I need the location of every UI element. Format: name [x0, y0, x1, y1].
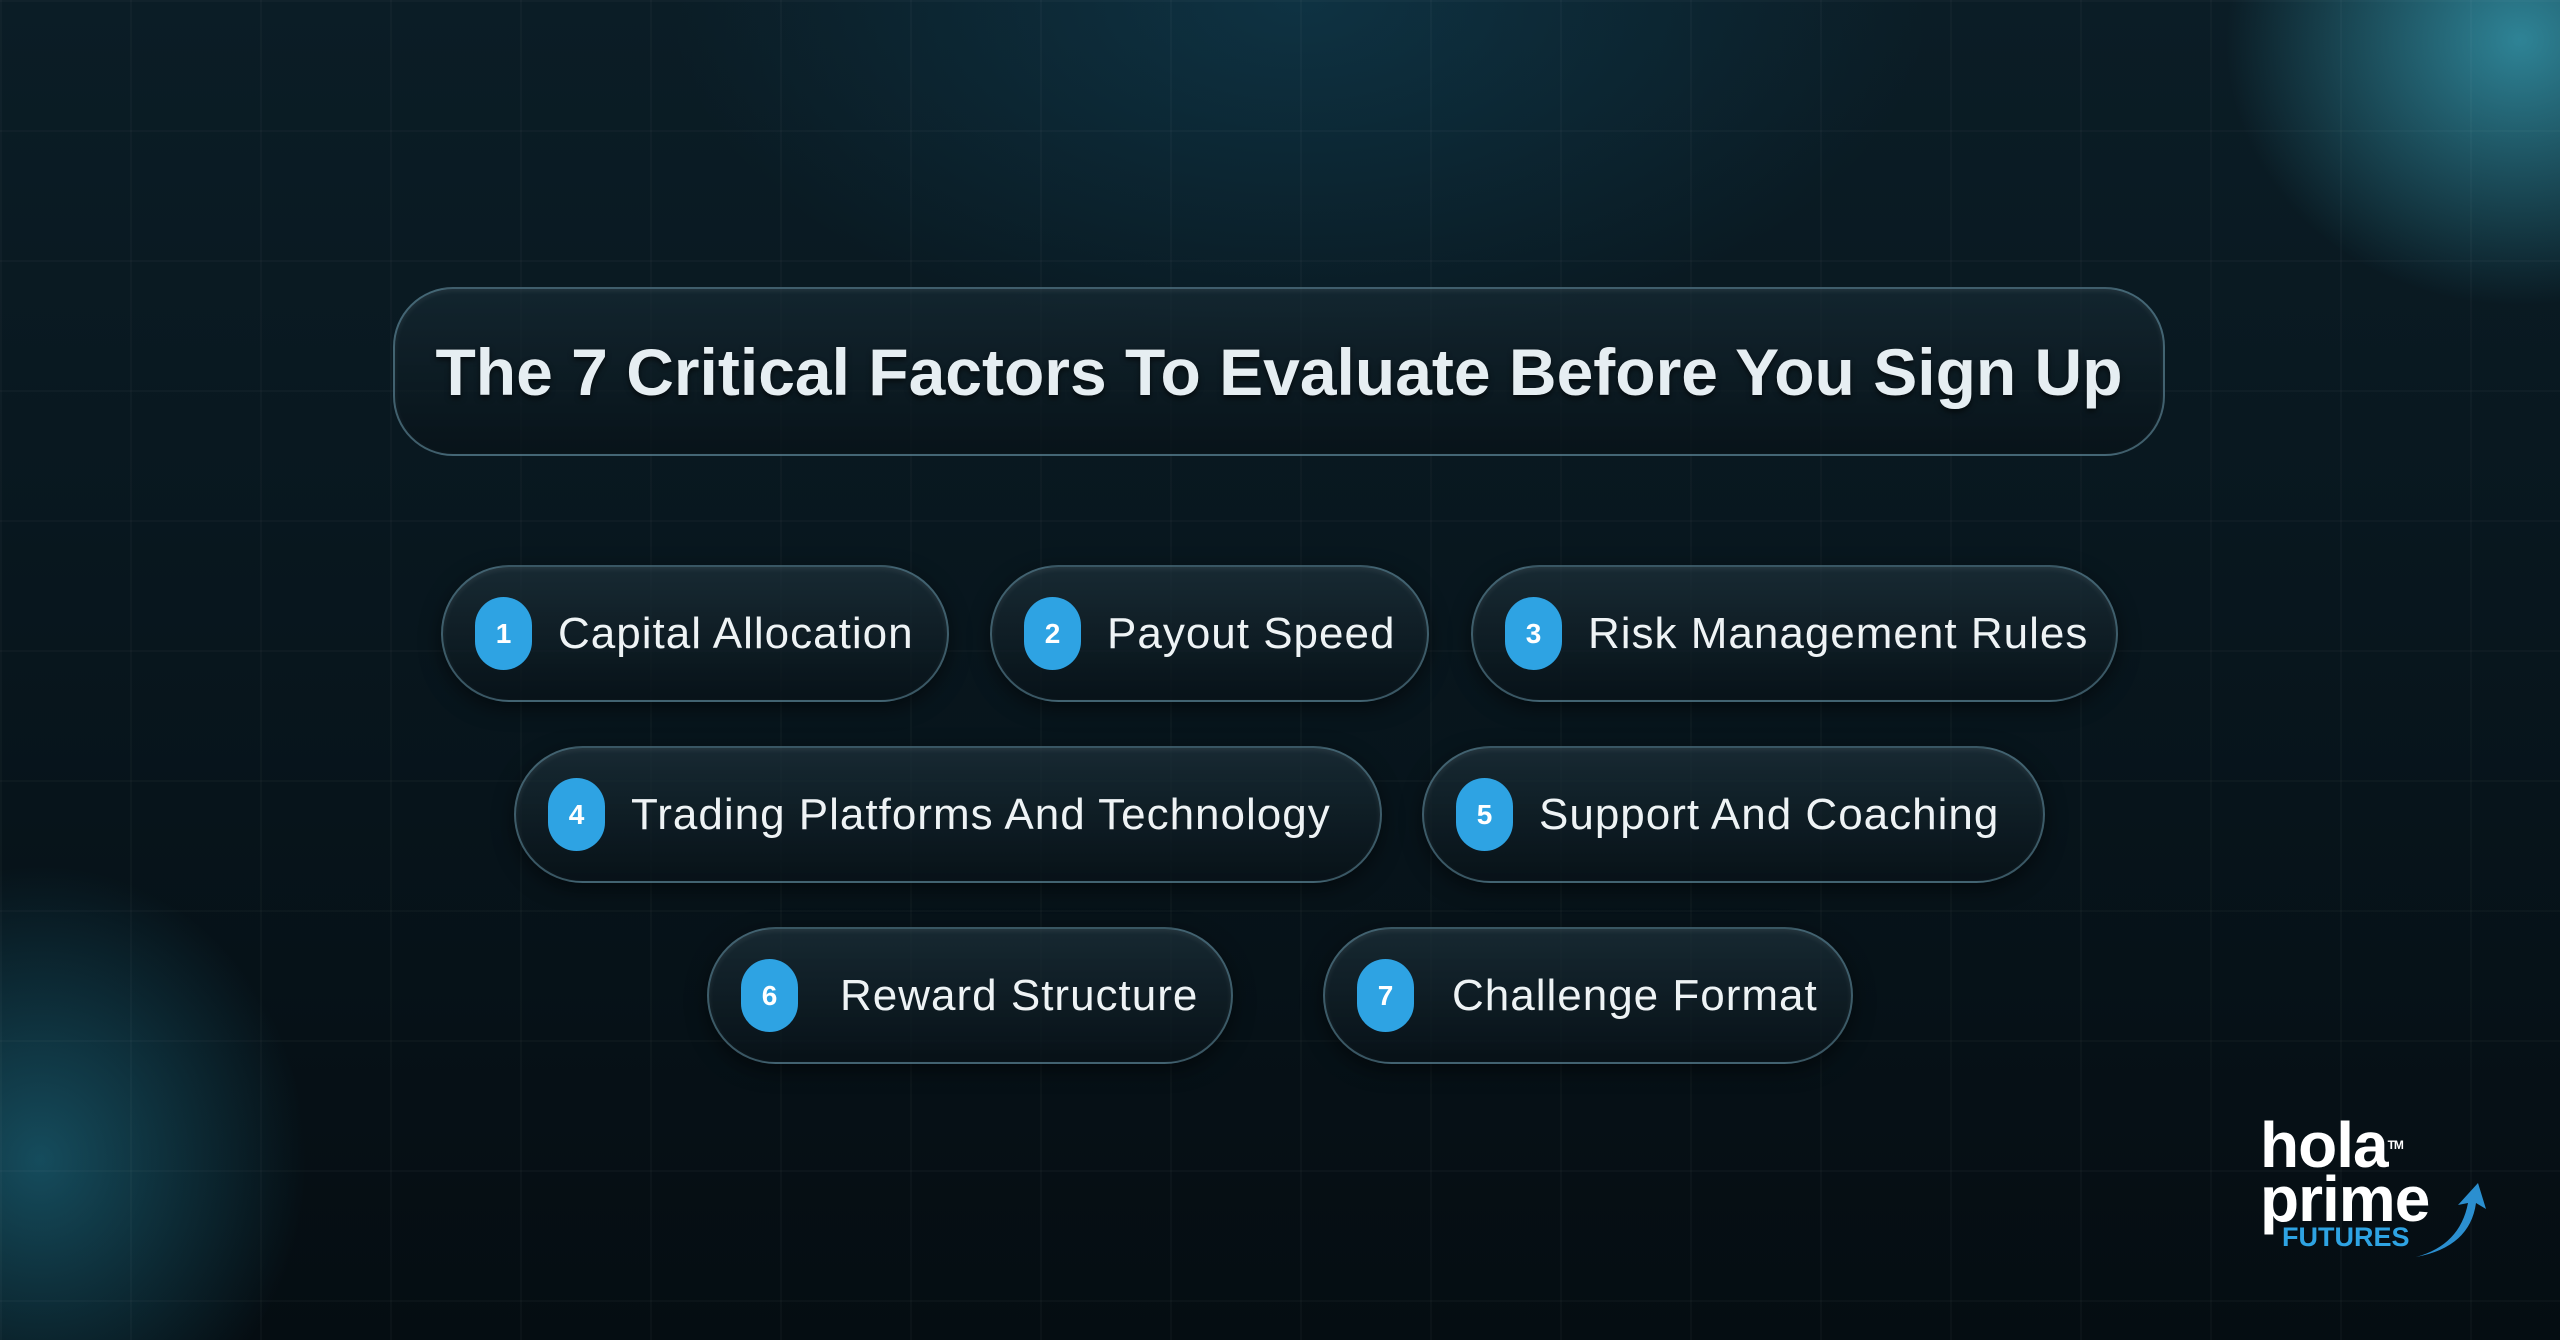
pill 2: Payout Speed	[1107, 608, 1395, 658]
pill 3: 3	[1526, 618, 1541, 648]
pill 6: Reward Structure	[840, 970, 1198, 1020]
logo	[2260, 1109, 2486, 1257]
pill 7: 7	[1378, 980, 1393, 1010]
pill 5: 5	[1477, 798, 1492, 830]
logo: FUTURES	[2282, 1222, 2410, 1252]
title	[393, 287, 2165, 456]
pill 5: Support And Coaching	[1539, 790, 1999, 838]
pill 1	[441, 565, 949, 702]
logo: prime	[2260, 1163, 2429, 1235]
pill 6	[707, 927, 1233, 1064]
pill 6: 6	[762, 980, 777, 1010]
pill 4: 4	[569, 798, 584, 830]
pill 4: Trading Platforms And Technology	[631, 790, 1331, 838]
title: The 7 Critical Factors To Evaluate Before You Sign Up	[435, 334, 2123, 408]
pill 3: Risk Management Rules	[1588, 608, 2088, 658]
pill 7	[1323, 927, 1853, 1064]
pill 7: Challenge Format	[1452, 970, 1818, 1020]
pill 1: Capital Allocation	[558, 608, 914, 658]
pill 4	[514, 746, 1382, 883]
pill 1: 1	[496, 618, 511, 648]
pill 2: 2	[1045, 618, 1060, 648]
logo: holaTM	[2260, 1109, 2403, 1181]
pill 2	[990, 565, 1429, 702]
pill 5	[1422, 746, 2045, 883]
pill 3	[1471, 565, 2118, 702]
